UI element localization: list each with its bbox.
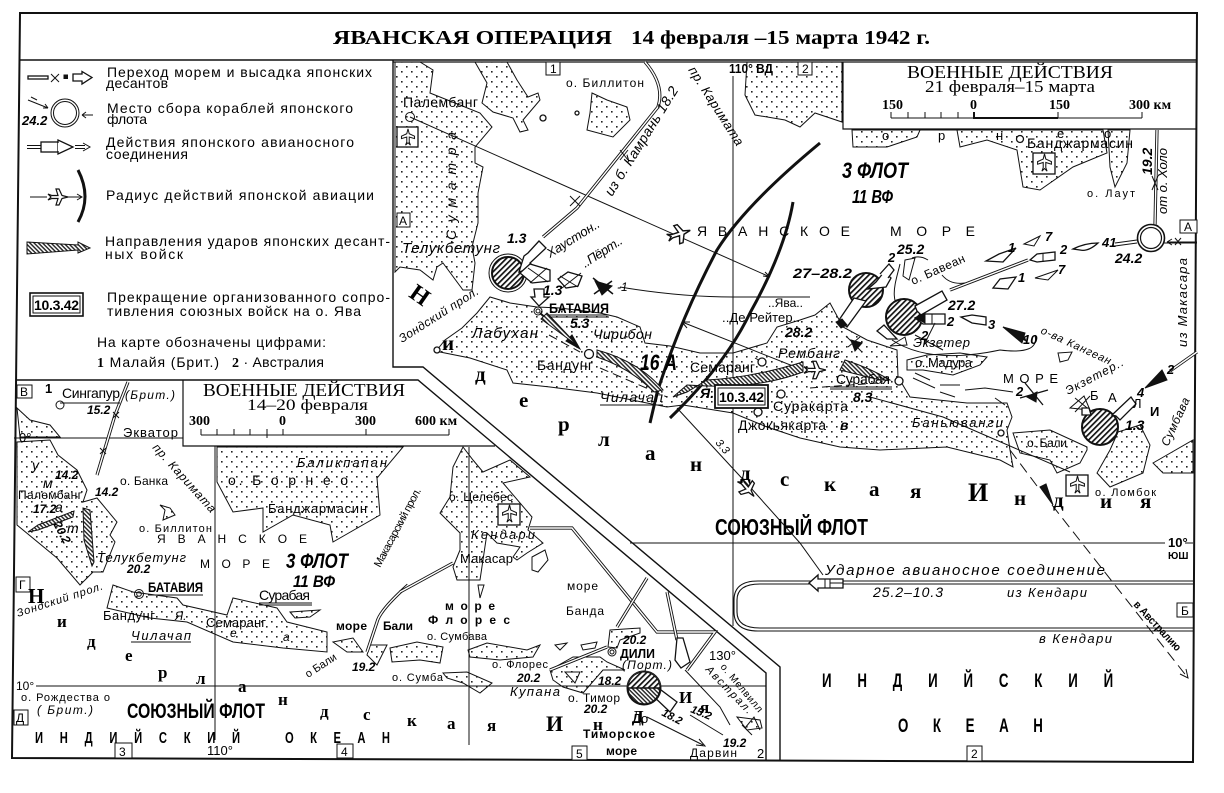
labels of main map: 10 — [1023, 332, 1038, 347]
labels of main map: ЮШ — [1168, 551, 1188, 562]
labels of inset map: Ф л о р е с — [428, 613, 510, 627]
labels of main map: Хаустон.. — [543, 216, 602, 261]
sea name: Нидерландская Индия, inset map: д — [87, 632, 96, 651]
labels of inset map: 15.2 — [87, 403, 111, 417]
legend text: resistance ended: Прекращение организованного сопро- — [107, 289, 390, 305]
labels of inset map: море — [567, 579, 598, 593]
icon: resistance ended date box — [30, 293, 83, 316]
labels of inset map: 18.2 — [660, 707, 684, 728]
labels of inset map: Банджармасин — [268, 501, 367, 516]
label: Indian Ocean, main map: И Н Д И Й С К И Й — [822, 670, 1113, 692]
panel: scale 14–20 February: 300 — [189, 414, 210, 429]
labels of inset map: 19.2 — [723, 736, 747, 750]
labels of main map: 10° — [1168, 535, 1188, 550]
labels of main map: М О Р Е — [1003, 371, 1058, 386]
labels of inset map: М О Р Е — [200, 557, 270, 571]
labels of main map: в Кендари — [1039, 631, 1112, 646]
labels of main map: 110° ВД — [729, 61, 774, 76]
sea name: Нидерландская Индия, inset map: я — [487, 716, 496, 735]
labels of inset map: Зондский прол. — [15, 581, 105, 620]
sea name: Нидерландская Индия, inset map: л — [196, 669, 206, 688]
labels of inset map: о. Биллитон — [139, 523, 212, 535]
labels of main map: 28.2 — [784, 324, 812, 340]
labels of main map: 8.3 — [853, 389, 873, 405]
labels of inset map: (Порт.) — [622, 658, 672, 672]
labels of main map: 27.2 — [947, 297, 975, 313]
labels of main map: 27–28.2 — [792, 265, 852, 281]
labels of main map: 16 А — [640, 350, 677, 375]
legend text: resistance ended: тивления союзных войск на о. Ява — [107, 303, 361, 319]
legend text: aviation radius: Радиус действий японской авиации — [106, 187, 374, 203]
panel: scale 14–20 February: 600 км — [415, 414, 458, 429]
sea name: Нидерландская Индия, main map: л — [598, 427, 610, 451]
grid reference letters: 3 — [119, 745, 126, 759]
sea name: Нидерландская Индия, main map: д — [475, 362, 486, 386]
labels of inset map — [15, 381, 765, 761]
labels of inset map: Баликпапан — [297, 455, 387, 470]
sea name: Нидерландская Индия, inset map: а — [447, 714, 456, 733]
legend text: map numbers: 1 Малайя (Брит.) — [97, 354, 219, 371]
legend text: map numbers — [97, 334, 326, 371]
sea name: Нидерландская Индия, inset map: Н — [28, 584, 44, 608]
label: allied fleet, inset map: СОЮЗНЫЙ ФЛОТ — [127, 699, 265, 723]
legend text: map numbers: На карте обозначены цифрами: — [97, 334, 326, 350]
labels of main map: Чилачап — [600, 389, 663, 405]
panel: scale 14–20 February: 0 — [279, 414, 286, 429]
labels of main map: 3 — [988, 317, 996, 332]
labels of inset map: Сингапур — [62, 385, 120, 401]
labels of inset map: у — [31, 457, 40, 473]
labels of inset map: 3 ФЛОТ — [286, 550, 350, 573]
legend text: landing strikes — [105, 233, 390, 262]
labels of inset map: о Бали — [303, 651, 339, 681]
labels of inset map: 20.2 — [516, 671, 541, 685]
labels of main map: Б — [1090, 388, 1099, 403]
labels of inset map: 11 ВФ — [293, 572, 336, 591]
labels of inset map: 130° — [709, 648, 736, 663]
legend text: landing — [106, 64, 372, 91]
panel: scale 21 February – 15 March: 150 — [882, 98, 903, 113]
sea name: Нидерландская Индия, inset map: е — [125, 646, 133, 665]
panel: scale 21 February – 15 March: 21 февраля–15 марта — [925, 77, 1096, 96]
labels of main map: Я В А Н С К О Е — [697, 223, 850, 239]
labels of inset map: БАТАВИЯ — [148, 579, 203, 595]
sea name: Нидерландская Индия, inset map: И — [546, 711, 563, 736]
labels of inset map: Семаранг — [206, 615, 266, 630]
label: Indian Ocean, inset map: И Н Д И Й С К И Й — [35, 727, 240, 746]
carrier and ship icons, main map — [406, 112, 1181, 591]
labels of inset map: Я В А Н С К О Е — [157, 532, 307, 546]
sea name: Нидерландская Индия, main map: и — [442, 331, 454, 355]
panel: scale 14–20 February: 14–20 февраля — [247, 397, 369, 414]
labels of main map: пр. Каримата — [685, 64, 747, 148]
labels of inset map: Палембанг — [18, 488, 83, 502]
labels of main map: Рембанг — [778, 345, 840, 361]
labels of main map: о — [882, 128, 889, 143]
labels of main map: Баньюванги — [912, 415, 1003, 430]
islands of main map — [395, 62, 1193, 487]
sea name: Нидерландская Индия, main map: я — [910, 479, 921, 503]
labels of main map: Лабухан — [471, 325, 538, 342]
labels of main map: н — [996, 128, 1003, 143]
labels of inset map: Сурабая — [259, 587, 310, 603]
labels of inset map: е — [230, 626, 237, 640]
sea name: Нидерландская Индия, main map: я — [1140, 489, 1151, 513]
labels of inset map: ( Брит.) — [37, 703, 93, 717]
labels of inset map: 2 — [757, 746, 764, 761]
sea name: Нидерландская Индия, inset map: к — [407, 711, 417, 730]
panel: scale 14–20 February: 300 — [355, 414, 376, 429]
labels of main map: 1.3 — [507, 230, 527, 246]
labels of inset map: 1 — [45, 381, 52, 396]
labels of main map: Ударное авианосное соединение — [824, 562, 1105, 579]
panel: legend — [21, 64, 390, 371]
grid reference letters: 2 — [971, 747, 978, 761]
labels of main map: Джокьякарта — [738, 417, 826, 433]
sea name: Нидерландская Индия, inset map: р — [158, 663, 167, 682]
title: 14 февраля –15 марта 1942 г. — [631, 27, 930, 49]
sea name: Нидерландская Индия, main map: е — [519, 388, 528, 412]
label: Indian Ocean, inset map: О К Е А Н — [285, 728, 390, 746]
labels of main map: 2 — [1015, 384, 1024, 399]
sea name: Нидерландская Индия, main map: с — [780, 467, 789, 491]
legend text: landing: десантов — [106, 75, 168, 91]
labels of inset map: 20.2 — [622, 633, 647, 647]
labels of inset map: Макасарский прол. — [372, 486, 424, 569]
sea name: Нидерландская Индия, main map: а — [869, 477, 880, 501]
labels of inset map: т — [67, 520, 79, 536]
labels of main map: о. Бали — [1027, 436, 1067, 450]
labels of inset map: море — [606, 744, 637, 758]
labels of inset map: о. Б о р н е о — [228, 472, 348, 488]
labels of inset map: о. Флорес — [492, 659, 548, 671]
label: Indian Ocean, main map — [822, 670, 1113, 737]
labels of main map: 1 — [1018, 270, 1025, 285]
labels of inset map: о. Мелвилл — [718, 662, 765, 715]
labels of main map: 3 ФЛОТ — [842, 158, 909, 183]
labels of inset map: 110° — [207, 743, 233, 758]
labels of main map: 2 — [1059, 242, 1068, 257]
date box 10.3.42: 10.3.42 — [719, 389, 764, 405]
labels of main map: о. Ломбок — [1095, 487, 1156, 499]
labels of main map: Сумбава — [1158, 395, 1193, 448]
labels of inset map: м о р е — [445, 599, 495, 613]
panel: scale 21 February – 15 March: 0 — [970, 98, 977, 113]
labels of inset map: о. Сумбава — [427, 631, 488, 643]
icon: landing strike arrow — [27, 242, 90, 254]
labels of main map: Банджармасин — [1027, 135, 1133, 151]
labels of main map: 2 — [920, 328, 929, 343]
labels of inset map: 17.2 — [33, 502, 57, 516]
labels of main map: ..Пёрт.. — [578, 233, 625, 271]
labels of inset map: а — [283, 630, 290, 644]
labels of main map: Чирибон — [593, 326, 652, 342]
sea name: Нидерландская Индия, main map: Н — [404, 280, 435, 312]
legend text: carrier force: соединения — [106, 146, 188, 162]
grid reference letters: 5 — [576, 747, 583, 761]
sea name: Нидерландская Индия, main map: к — [824, 472, 837, 496]
sea name: Нидерландская Индия, main map: И — [968, 478, 988, 507]
labels of main map: е — [1057, 126, 1064, 141]
labels of inset map: о. Целебес — [449, 490, 513, 504]
labels of inset map: Экватор — [123, 425, 178, 440]
labels of inset map: До — [632, 711, 648, 726]
labels of inset map: а — [55, 499, 63, 515]
panel: scale 14–20 February — [189, 380, 458, 438]
routes of inset map — [28, 382, 760, 746]
labels of main map: Семаранг — [690, 359, 755, 375]
labels of main map: 7 — [1045, 229, 1053, 244]
labels of main map: А — [1108, 390, 1117, 405]
labels of main map: о. Бавеан — [909, 251, 967, 288]
label: allied fleet, main map: СОЮЗНЫЙ ФЛОТ — [715, 513, 868, 540]
labels of inset map: Банда — [566, 604, 604, 618]
icon: assembly point: 24.2 — [21, 113, 48, 128]
labels of main map: 5.3 — [570, 315, 590, 331]
legend text: assembly point: флота — [107, 111, 147, 127]
title: ЯВАНСКАЯ ОПЕРАЦИЯ — [333, 27, 613, 49]
labels of inset map: 20.2 — [583, 702, 608, 716]
labels of main map: И — [1150, 404, 1159, 419]
labels of main map: 2 — [1166, 362, 1175, 377]
labels of main map: р — [938, 128, 945, 143]
labels of inset map: Купана — [510, 684, 560, 699]
icon: aviation radius — [30, 170, 85, 222]
legend text: landing: Переход морем и высадка японских — [107, 64, 372, 80]
labels of inset map: Бали — [383, 619, 413, 633]
labels of inset map: Кендари — [471, 527, 535, 542]
labels of inset map: 19.2 — [352, 660, 376, 674]
labels of main map: о — [1104, 126, 1111, 141]
labels of main map: Зондский прол. — [396, 284, 481, 346]
islands of inset map — [17, 408, 762, 730]
labels of inset map: Телукбетунг — [97, 550, 187, 565]
labels of main map: 3.3 — [713, 437, 732, 457]
labels of inset map: о. Тимор — [568, 691, 620, 705]
labels of main map: Я. — [699, 385, 714, 401]
labels of inset map: о. Рождества о — [21, 692, 110, 704]
icon: carrier force — [27, 140, 90, 154]
labels of inset map: море — [336, 619, 367, 633]
sea name: Нидерландская Индия, inset map: н — [278, 690, 288, 709]
labels of main map: о. Лаут — [1087, 188, 1135, 200]
sea name: Нидерландская Индия, main map: а — [645, 441, 656, 465]
labels of inset map: м — [43, 475, 53, 491]
legend text: carrier force: Действия японского авианосного — [106, 134, 354, 150]
label: Indian Ocean, inset map — [35, 727, 390, 746]
sea name: Нидерландская Индия, inset map: И — [679, 688, 692, 707]
labels of inset map: 18.2 — [598, 674, 622, 688]
panel: scale 21 February – 15 March: ВОЕННЫЕ ДЕЙСТВИЯ — [907, 62, 1113, 82]
labels of main map: 2 — [887, 250, 896, 265]
labels of main map: о. Мадура — [915, 355, 973, 370]
sea name: Нидерландская Индия, inset map: н — [593, 715, 603, 734]
labels of inset map: Макасар — [460, 551, 513, 566]
labels of main map: Сурабая — [836, 371, 890, 387]
icon: assembly point — [21, 97, 93, 128]
labels of inset map: 0° — [19, 430, 31, 445]
sea name: Нидерландская Индия, inset map: Д — [632, 707, 644, 726]
labels of inset map: Дарвин — [690, 746, 737, 760]
legend text: landing strikes: ных войск — [105, 246, 184, 262]
labels of main map: ..Де Рейтер.. — [722, 310, 800, 325]
labels of main map: Телукбетунг — [402, 240, 501, 257]
sea name: Нидерландская Индия, main map: д — [740, 461, 751, 485]
labels of inset map: Бандунг — [103, 608, 155, 623]
grid reference letters: А — [399, 214, 407, 228]
labels of inset map: Тиморское — [583, 727, 655, 741]
labels of main map: 41 — [1101, 235, 1116, 250]
labels of main map: Бандунг — [537, 357, 593, 373]
hatched fleet battle circles, main map — [489, 224, 1164, 445]
labels of inset map: пр. Каримата — [150, 441, 219, 516]
labels of main map: от о. Холо — [1155, 148, 1170, 214]
labels of main map: Л — [1133, 396, 1142, 411]
labels of main map: о-ва Кангеан — [1039, 325, 1113, 367]
labels of inset map: 20.2 — [50, 518, 74, 546]
panel: scale 21 February – 15 March: 300 км — [1129, 98, 1172, 113]
panel: scale 21 February – 15 March: 150 — [1049, 98, 1070, 113]
labels of inset map: (Брит.) — [125, 388, 175, 402]
labels of main map: из б. Камрань 18.2 — [601, 83, 681, 199]
labels of main map: в — [840, 417, 849, 433]
labels of main map: из Макасара — [1175, 258, 1190, 347]
grid reference letters: А — [1184, 220, 1192, 234]
sea name: Нидерландская Индия, inset map — [28, 584, 709, 736]
labels of main map: Суракарта — [773, 398, 848, 414]
labels of main map: БАТАВИЯ — [549, 300, 609, 316]
labels of main map: М О Р Е — [890, 223, 975, 239]
sea name: Нидерландская Индия, main map: н — [1014, 486, 1026, 510]
labels of main map: 1.3 — [1125, 417, 1145, 433]
grid reference letters: В — [20, 385, 28, 399]
labels of inset map: 20.2 — [126, 562, 151, 576]
labels of main map: 25.2 — [896, 241, 924, 257]
labels of main map — [396, 61, 1193, 654]
grid reference letters: 2 — [802, 62, 809, 76]
labels of inset map: 14.2 — [55, 468, 79, 482]
sea name: Нидерландская Индия, main map: н — [690, 452, 702, 476]
labels of inset map: Чилачап — [131, 628, 191, 643]
labels of main map: 1.3 — [543, 282, 563, 298]
sea name: Нидерландская Индия, inset map: а — [238, 677, 247, 696]
date box 10.3.42 — [715, 385, 768, 408]
routes of main map — [410, 62, 1197, 678]
sea name: Нидерландская Индия, inset map: с — [363, 705, 371, 724]
grid reference letters: Г — [19, 578, 26, 592]
labels of inset map: 14.2 — [95, 485, 119, 499]
title — [333, 27, 930, 49]
labels of main map: Палембанг — [403, 94, 478, 110]
grid reference letters: 1 — [550, 62, 557, 76]
label: Indian Ocean, main map: О К Е А Н — [898, 716, 1043, 737]
labels of main map: 7 — [1058, 262, 1066, 277]
labels of main map: Экзетер.. — [1063, 355, 1126, 398]
sea name: Нидерландская Индия, main map: и — [1100, 489, 1112, 513]
labels of main map: 4 — [1136, 385, 1145, 400]
sea name: Нидерландская Индия, inset map: д — [320, 702, 329, 721]
labels of main map: -1 — [617, 280, 628, 294]
sea name: Нидерландская Индия, inset map: и — [57, 612, 67, 631]
sea name: Нидерландская Индия, main map — [404, 280, 1151, 513]
labels of main map: 1 — [1008, 240, 1015, 255]
labels of main map: Экзетер — [913, 335, 970, 350]
legend text: assembly point: Место сбора кораблей японского — [107, 100, 353, 116]
labels of main map: о. Биллитон — [566, 76, 644, 90]
air radius arcs — [650, 143, 820, 423]
labels of inset map: 15.2 — [689, 704, 713, 723]
icon: sea crossing and landing — [28, 72, 92, 84]
labels of inset map: Австрал. — [702, 663, 755, 717]
legend text: resistance ended — [107, 289, 390, 319]
grid reference letters: Б — [1181, 604, 1189, 618]
panel: scale 21 February – 15 March — [882, 62, 1172, 118]
sea name: Нидерландская Индия, main map: р — [558, 412, 570, 436]
legend text: landing strikes: Направления ударов японских десант- — [105, 233, 390, 249]
labels of main map: 19.2 — [1139, 148, 1155, 175]
labels of main map: 11 ВФ — [852, 187, 893, 207]
labels of main map: 24.2 — [1114, 250, 1142, 266]
labels of main map: С у м а т р а — [443, 132, 459, 240]
grid reference letters: 4 — [341, 745, 348, 759]
labels of inset map: о. Сумба — [392, 672, 444, 684]
icon: resistance ended date box: 10.3.42 — [34, 297, 79, 313]
labels of main map: из Кендари — [1007, 585, 1087, 600]
labels of main map: 25.2–10.3 — [872, 584, 943, 600]
labels of main map: ..Ява.. — [768, 296, 803, 310]
labels of inset map: 10° — [16, 679, 34, 693]
panel: scale 14–20 February: ВОЕННЫЕ ДЕЙСТВИЯ — [203, 380, 405, 400]
legend text: map numbers: 2 · Австралия — [232, 354, 324, 371]
grid reference letters: Д — [16, 711, 24, 725]
air bases with plane icons — [397, 127, 1088, 525]
labels of inset map: Я. — [174, 609, 187, 623]
settlements, main map — [434, 111, 1024, 436]
legend text: assembly point — [107, 100, 353, 127]
labels of main map: 2 — [946, 314, 955, 329]
labels of inset map: ДИЛИ — [620, 646, 655, 661]
legend text: carrier force — [106, 134, 354, 162]
labels of inset map: о. Банка — [120, 474, 168, 488]
labels of main map: в Австралию — [1131, 599, 1183, 654]
sea name: Нидерландская Индия, inset map: я — [700, 698, 709, 717]
sea name: Нидерландская Индия, main map: д — [1053, 488, 1064, 512]
